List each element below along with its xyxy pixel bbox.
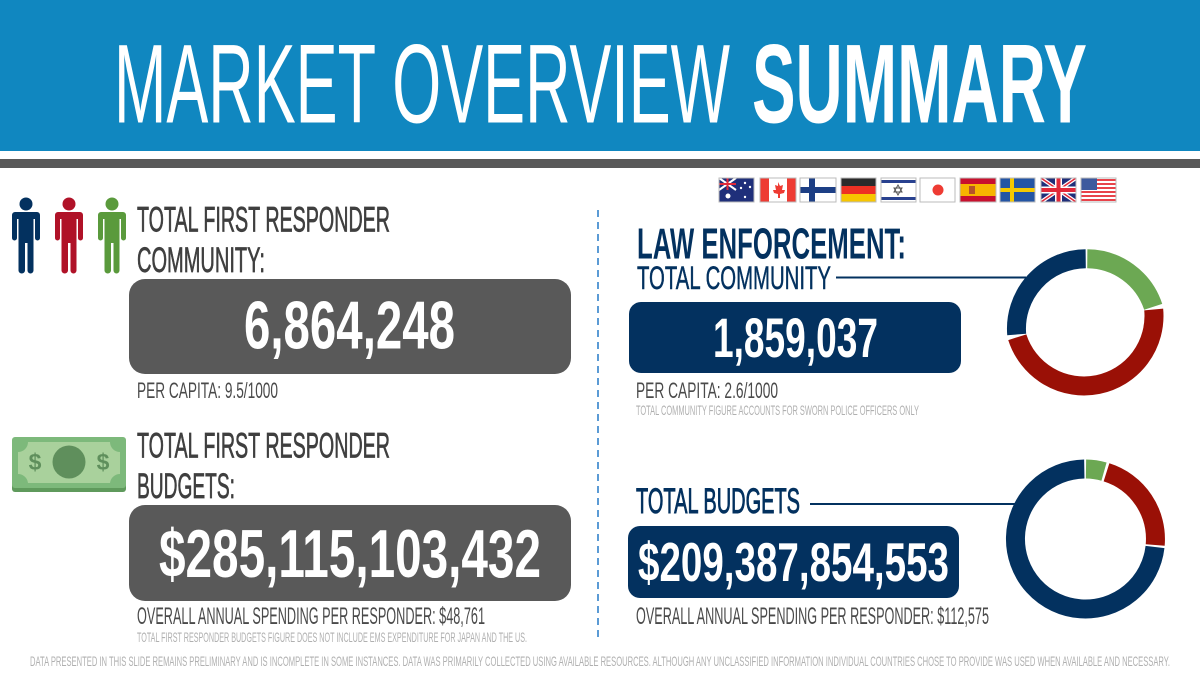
flag: Germany (841, 178, 876, 202)
title: MARKET OVERVIEW (114, 22, 730, 146)
text: budgets note: TOTAL FIRST RESPONDER BUDGETS FIGURE DOES NOT INCLUDE EMS EXPENDITURE FOR JAPAN AND THE US. (137, 629, 527, 645)
text: community per capita: PER CAPITA: 9.5/1000 (137, 378, 278, 403)
flag: United States (1081, 178, 1116, 202)
icon: banknote (12, 437, 126, 492)
icon: banknote: $ (97, 449, 110, 475)
flag: Canada (760, 178, 796, 202)
heading: law enforcement: LAW ENFORCEMENT: (637, 220, 906, 268)
panel: law enforcement budgets (628, 526, 959, 598)
text: community note: TOTAL COMMUNITY FIGURE ACCOUNTS FOR SWORN POLICE OFFICERS ONLY (636, 402, 919, 418)
donut chart: budgets share (1015, 469, 1155, 609)
figure: red (55, 198, 83, 274)
donut chart: community share (1016, 259, 1154, 386)
flag: Japan (920, 178, 955, 202)
panel: community total (129, 279, 571, 374)
flag: Sweden (1000, 178, 1035, 202)
heading: total first responder community (137, 200, 390, 280)
icon: banknote: $ (29, 449, 42, 475)
panel: budgets total (129, 505, 571, 601)
flag: Israel (881, 178, 916, 202)
heading: total community with leader line: TOTAL COMMUNITY (637, 260, 831, 296)
header banner (0, 0, 1200, 151)
icon: three responder figures (12, 198, 126, 274)
heading: total first responder community: COMMUNITY: (137, 241, 265, 280)
figure: blue (12, 198, 40, 274)
text: spending per responder left: OVERALL ANNUAL SPENDING PER RESPONDER: $48,761 (137, 603, 485, 630)
heading: total first responder budgets: TOTAL FIRST RESPONDER (137, 426, 390, 466)
flag: Australia (719, 178, 754, 202)
heading: total first responder community: TOTAL FIRST RESPONDER (137, 200, 390, 240)
heading: total first responder budgets (137, 426, 390, 506)
heading: total budgets with leader line: TOTAL BUDGETS (636, 482, 800, 521)
flag: United Kingdom (1041, 178, 1076, 202)
panel: law enforcement budgets: $209,387,854,553 (638, 531, 949, 593)
icon: country flags (719, 178, 1116, 202)
flag: Finland (800, 178, 836, 202)
figure: green (98, 198, 126, 274)
heading: total first responder budgets: BUDGETS: (137, 467, 235, 506)
flag: Spain (960, 178, 996, 202)
panel: budgets total: $285,115,103,432 (159, 516, 541, 592)
panel: law enforcement community (629, 302, 961, 373)
panel: law enforcement community: 1,859,037 (713, 306, 878, 369)
text: law enforcement per capita: PER CAPITA: 2.6/1000 (636, 378, 778, 403)
panel: community total: 6,864,248 (244, 288, 455, 364)
